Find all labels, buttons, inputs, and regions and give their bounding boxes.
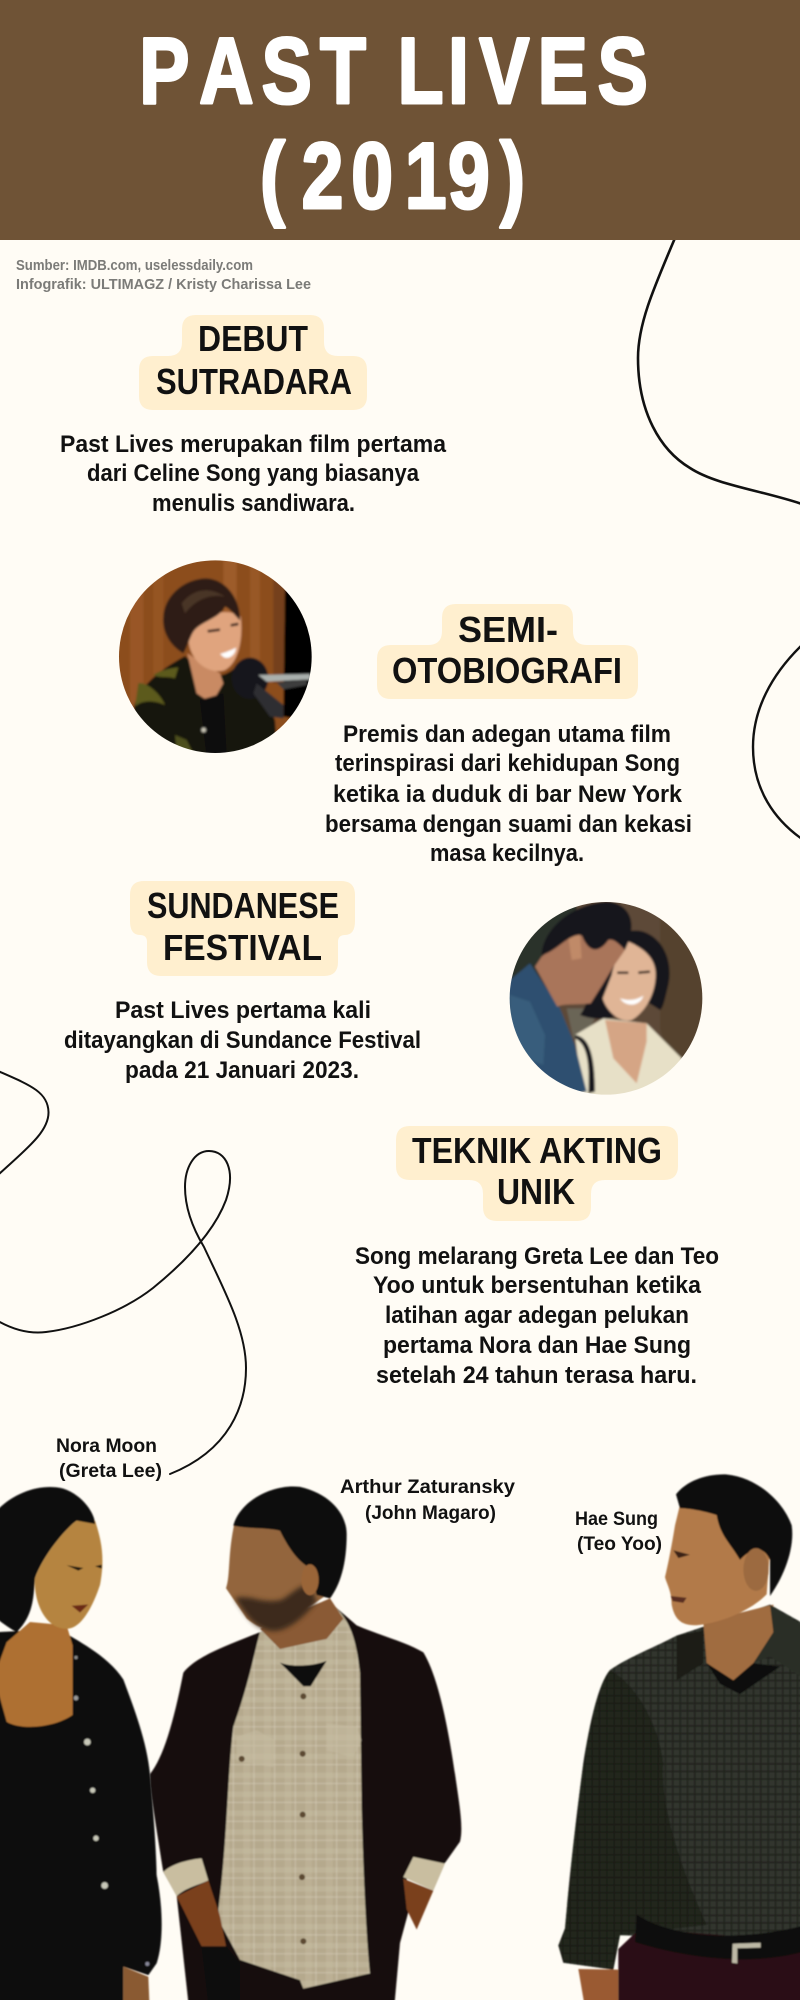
shirt shadow [558,1670,707,1970]
body text: ditayangkan di Sundance Festival [64,1027,421,1054]
decorative curve: looping line to Nora Moon label [0,1151,246,1474]
hair [676,1474,792,1596]
forearms [177,1880,226,1946]
figure: Arthur (John Magaro) [150,1486,461,2000]
buttons [84,1739,91,1745]
heading tag: TEKNIK AKTING [412,1130,662,1171]
heading tag [396,1126,678,1221]
panel: semi-otobiografi [325,604,692,867]
body text: pertama Nora dan Hae Sung [383,1332,691,1359]
character label: Nora Moon: (Greta Lee) [59,1461,162,1482]
body text: menulis sandiwara. [152,490,355,517]
heading tag: SUTRADARA [156,361,352,402]
forearm [578,1969,618,2000]
decorative curve: middle right [753,645,800,839]
plaid shirt [218,1603,370,1989]
header banner [0,0,800,240]
trousers [618,1928,800,2000]
body text: bersama dengan suami dan kekasi [325,811,692,838]
character label: Nora Moon: Nora Moon [56,1436,157,1457]
cardigan and trousers [150,1605,461,2000]
beard [235,1585,317,1631]
heading tag: DEBUT [198,318,308,359]
character label: Nora Moon [56,1436,162,1482]
body text [325,721,692,867]
heading tag [130,881,355,976]
hair [163,578,240,653]
heading tag [139,315,367,410]
character label: Arthur Zaturansky: Arthur Zaturansky [340,1477,515,1498]
body text [60,431,447,517]
character label: Hae Sung: Hae Sung [575,1509,658,1530]
body text: dari Celine Song yang biasanya [87,460,420,487]
hand [123,1967,150,2000]
cardigan [0,1629,162,2000]
body text: Yoo untuk bersentuhan ketika [373,1272,702,1299]
face [226,1521,327,1630]
source credits: Infografik: ULTIMAGZ / Kristy Charissa Lee [16,276,311,293]
face [35,1521,102,1629]
pockets [237,1723,362,1767]
heading tag: SUNDANESE [147,885,339,926]
figure: Hae Sung (Teo Yoo) [558,1474,800,2000]
photo: Celine Song at microphone [119,560,312,753]
heading tag: FESTIVAL [163,927,322,968]
shirt [558,1605,800,1970]
man shirt [507,963,587,1098]
woman hair [580,931,670,1019]
photo: Nora and Hae Sung laughing [510,902,702,1095]
panel: teknik akting unik [355,1126,719,1389]
woman shirt and neck [575,1018,682,1102]
hair [0,1487,95,1632]
body text: Past Lives pertama kali [115,997,371,1024]
face [188,612,241,671]
heading tag: UNIK [497,1171,575,1212]
decorative curve: top right [638,238,800,504]
neck [260,1598,343,1649]
cuffs [163,1859,208,1896]
panel: debut sutradara [60,315,447,517]
belt [635,1915,800,1959]
woman face [603,942,656,1021]
hair [233,1486,347,1598]
chest skin [0,1622,73,1727]
body text: ketika ia duduk di bar New York [333,781,683,808]
character label: Arthur Zaturansky: (John Magaro) [365,1503,496,1524]
panel: sundanese festival [64,881,421,1084]
heading tag: SEMI- [458,609,558,650]
body text: pada 21 Januari 2023. [125,1057,359,1084]
body text [64,997,421,1084]
decorative curve: left short [0,1071,49,1175]
source credits: Sumber: IMDB.com, uselessdaily.com [16,257,253,274]
title: year: (2019) [260,124,525,229]
character label: Hae Sung [575,1509,662,1555]
ear [301,1564,319,1595]
neck [187,653,223,703]
body text [355,1243,719,1389]
heading tag: OTOBIOGRAFI [392,650,622,691]
body text: masa kecilnya. [430,840,584,867]
figure: Nora Moon (Greta Lee) [0,1487,162,2000]
title: Past Lives: PAST LIVES [139,19,648,124]
neck [703,1605,773,1680]
collars [677,1630,703,1680]
heading tag [377,604,638,699]
body text: Premis dan adegan utama film [343,721,671,748]
microphone [232,658,268,699]
body text: setelah 24 tahun terasa haru. [376,1362,697,1389]
ear [743,1548,769,1591]
man face [535,935,625,1007]
man hair [542,902,632,955]
body text: Past Lives merupakan film pertama [60,431,447,458]
body text: latihan agar adegan pelukan [385,1302,689,1329]
body text: terinspirasi dari kehidupan Song [335,750,680,777]
buttons [300,1693,306,1699]
undershirt [280,1661,327,1686]
character label: Arthur Zaturansky [340,1477,515,1524]
source credits [16,257,311,293]
face [665,1505,770,1625]
character label: Hae Sung: (Teo Yoo) [577,1534,662,1555]
body text: Song melarang Greta Lee dan Teo [355,1243,719,1270]
jacket [133,655,277,753]
